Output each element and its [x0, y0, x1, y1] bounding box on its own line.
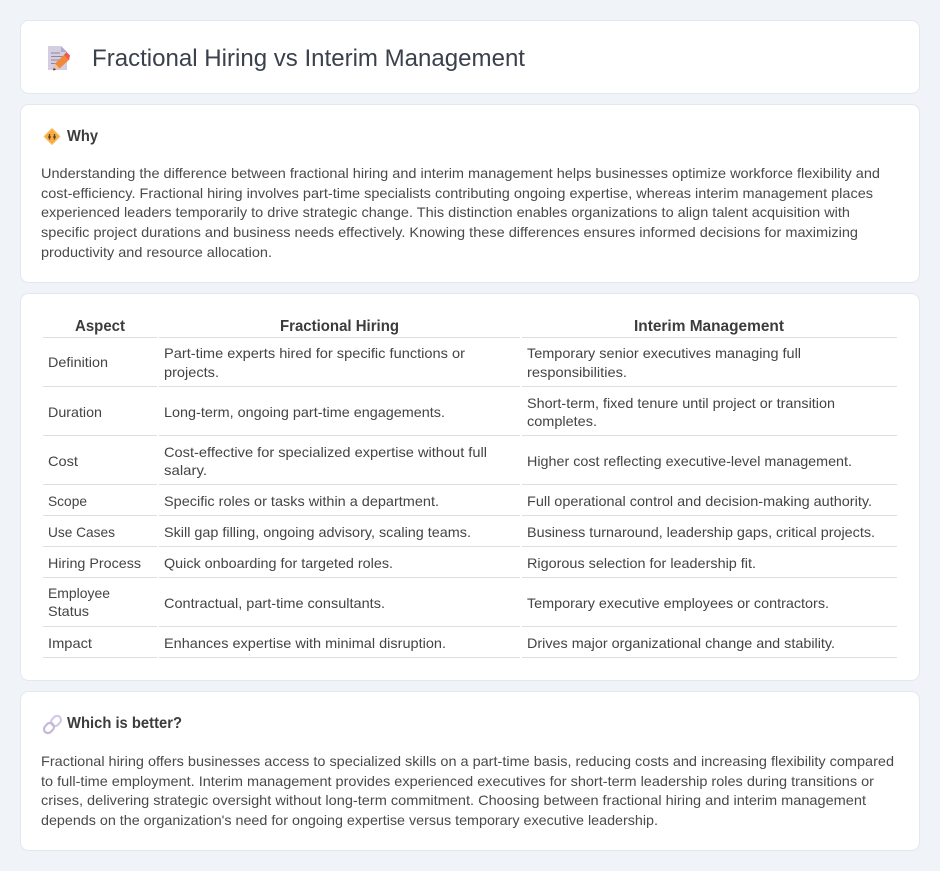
table rules: [43, 338, 897, 658]
row: employee status: Contractual, part-time consultants.: [164, 595, 385, 611]
row: duration: Duration: [48, 404, 102, 420]
row: use cases: Use Cases: [48, 524, 115, 540]
row: definition: Part-time experts hired for specific functions or: [164, 345, 465, 361]
row: hiring process: Rigorous selection for leadership fit.: [527, 555, 756, 571]
text block: why paragraph: cost-efficiency. Fractional hiring involves part-time specialists contributing ongoing expertise, whereas interim management places: [41, 185, 873, 201]
title: Fractional Hiring vs Interim Management: [92, 45, 525, 72]
row: scope: Full operational control and decision-making authority.: [527, 493, 872, 509]
icon: orange warning diamond: [44, 128, 60, 144]
text block: why paragraph: specific project durations and business needs effectively. Knowing these differences ensures informed decisions for maximizing: [41, 224, 858, 240]
heading: why: Why: [67, 128, 98, 145]
row: impact: [48, 635, 835, 651]
row: duration: completes.: [527, 413, 597, 429]
text block: which is better paragraph: depends on the organization's need for ongoing expertise versus temporary executive leadership.: [41, 812, 658, 828]
text block: why paragraph: Understanding the difference between fractional hiring and interim management helps businesses optimize workforce flexibility and: [41, 165, 880, 181]
row: cost: [48, 444, 852, 478]
panel: header: [20, 20, 920, 94]
table header row: Aspect: [75, 318, 126, 335]
row: impact: Impact: [48, 635, 92, 651]
row: definition: projects.: [164, 364, 219, 380]
text block: which is better paragraph: to full-time employment. Interim management provides experienced executives for short-term leadership roles during transitions or: [41, 773, 874, 789]
row: duration: Long-term, ongoing part-time engagements.: [164, 404, 445, 420]
row: employee status: Status: [48, 603, 89, 619]
row: cost: Cost: [48, 453, 78, 469]
row: hiring process: [48, 555, 756, 571]
icon: chain link: [42, 714, 63, 735]
row: scope: Scope: [48, 493, 87, 509]
text block: why paragraph: experienced leaders temporarily to drive strategic change. This distinction enables organizations to align talent acquisition with: [41, 204, 850, 220]
row: definition: Definition: [48, 354, 108, 370]
table header row: Interim Management: [634, 318, 785, 335]
panel: which is better: [20, 692, 920, 850]
row: scope: Specific roles or tasks within a department.: [164, 493, 439, 509]
text block: why paragraph: [41, 165, 880, 260]
heading: which is better: Which is better?: [67, 715, 182, 732]
row: scope: [48, 493, 872, 509]
row: cost: Higher cost reflecting executive-level management.: [527, 453, 852, 469]
row: definition: responsibilities.: [527, 364, 627, 380]
row: cost: salary.: [164, 462, 207, 478]
icon: memo with pencil: [48, 46, 70, 70]
table header row: Fractional Hiring: [280, 318, 399, 335]
row: hiring process: Quick onboarding for targeted roles.: [164, 555, 393, 571]
text block: which is better paragraph: crises, delivering strategic oversight without long-term commitment. Choosing between fractional hiring and interim management: [41, 792, 866, 808]
row: employee status: Temporary executive employees or contractors.: [527, 595, 829, 611]
row: use cases: Business turnaround, leadership gaps, critical projects.: [527, 524, 875, 540]
row: definition: Temporary senior executives managing full: [527, 345, 801, 361]
row: use cases: Skill gap filling, ongoing advisory, scaling teams.: [164, 524, 471, 540]
row: employee status: Employee: [48, 585, 110, 601]
row: impact: Enhances expertise with minimal disruption.: [164, 635, 446, 651]
text block: why paragraph: productivity and resource allocation.: [41, 244, 272, 260]
panel: why: [20, 104, 920, 282]
row: impact: Drives major organizational change and stability.: [527, 635, 835, 651]
text block: which is better paragraph: Fractional hiring offers businesses access to specialized skills on a part-time basis, reducing costs and increasing flexibility compared: [41, 753, 894, 769]
row: employee status: [48, 585, 829, 619]
row: duration: Short-term, fixed tenure until project or transition: [527, 395, 835, 411]
panel: comparison table: [20, 294, 920, 680]
text block: which is better paragraph: [41, 753, 894, 828]
row: definition: [48, 345, 801, 380]
row: hiring process: Hiring Process: [48, 555, 141, 571]
row: cost: Cost-effective for specialized expertise without full: [164, 444, 487, 460]
table header row: [75, 318, 785, 335]
row: duration: [48, 395, 835, 429]
row: use cases: [48, 524, 875, 540]
